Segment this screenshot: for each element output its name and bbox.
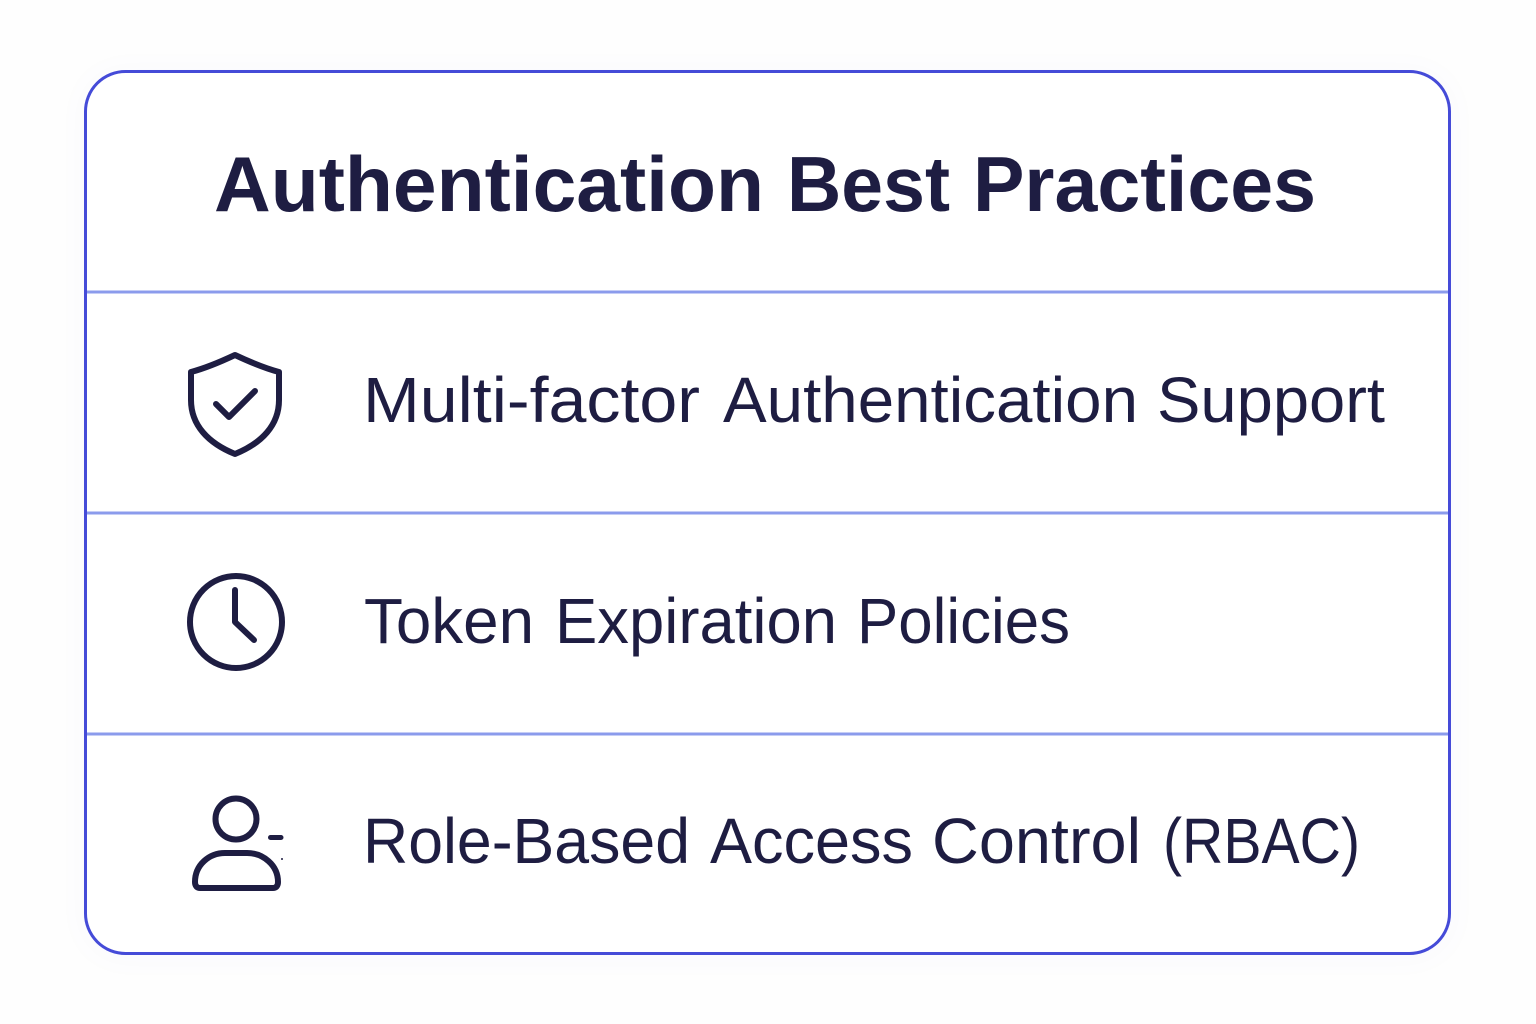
label: token expiration — [364, 585, 1070, 657]
heading: Best — [787, 140, 950, 228]
label: role-based access control: Control — [932, 805, 1141, 877]
label: token expiration: Policies — [857, 585, 1070, 657]
heading — [214, 140, 1316, 228]
label: token expiration: Expiration — [555, 585, 837, 657]
label: role-based access control — [363, 805, 1360, 877]
heading: Practices — [973, 140, 1316, 228]
row: multi-factor authentication — [191, 355, 1385, 454]
label: role-based access control: Role-Based — [363, 805, 690, 877]
label: role-based access control: Access — [710, 805, 913, 877]
row: role-based access control — [195, 798, 1360, 888]
label: multi-factor: Multi-factor — [363, 364, 700, 436]
icon: clock — [190, 576, 282, 668]
panel: card — [86, 72, 1450, 954]
row: token expiration — [190, 576, 1070, 668]
icon: user — [195, 798, 283, 888]
label: role-based access control: (RBAC) — [1163, 805, 1360, 877]
heading: Authentication — [214, 140, 764, 228]
label: multi-factor: Authentication — [723, 364, 1138, 436]
label: multi-factor — [363, 364, 1385, 436]
label: token expiration: Token — [364, 585, 534, 657]
icon: shield with check — [191, 355, 279, 454]
label: multi-factor: Support — [1157, 364, 1385, 436]
